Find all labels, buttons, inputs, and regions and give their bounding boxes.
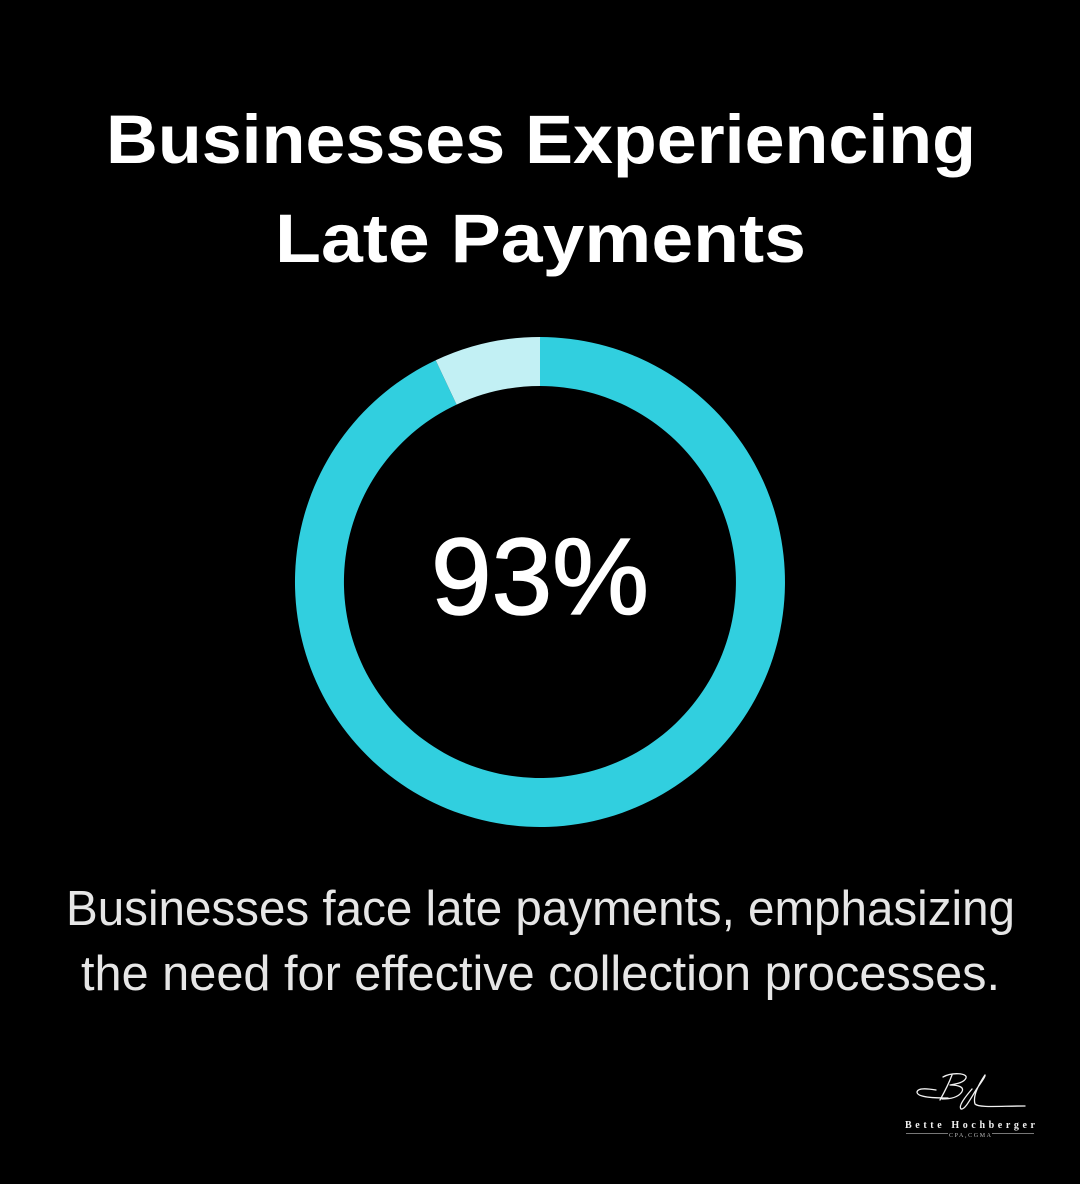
description text: the need for effective collection processes. — [81, 947, 1000, 1001]
logo name: Bette Hochberger — [905, 1120, 1036, 1131]
ring segment: remaining 7 percent — [436, 337, 540, 405]
title — [106, 101, 976, 277]
title: Late Payments — [275, 200, 806, 277]
logo credentials: CPA,CGMA — [949, 1133, 992, 1139]
donut chart: 93% — [295, 337, 785, 827]
description text — [66, 882, 1015, 1001]
logo: Bette Hochberger signature — [905, 1074, 1036, 1139]
ring segment: 93 percent — [295, 337, 785, 827]
signature mark — [917, 1074, 1025, 1109]
description text: Businesses face late payments, emphasizing — [66, 882, 1015, 936]
center value: 93% — [431, 516, 649, 638]
title: Businesses Experiencing — [106, 101, 976, 178]
